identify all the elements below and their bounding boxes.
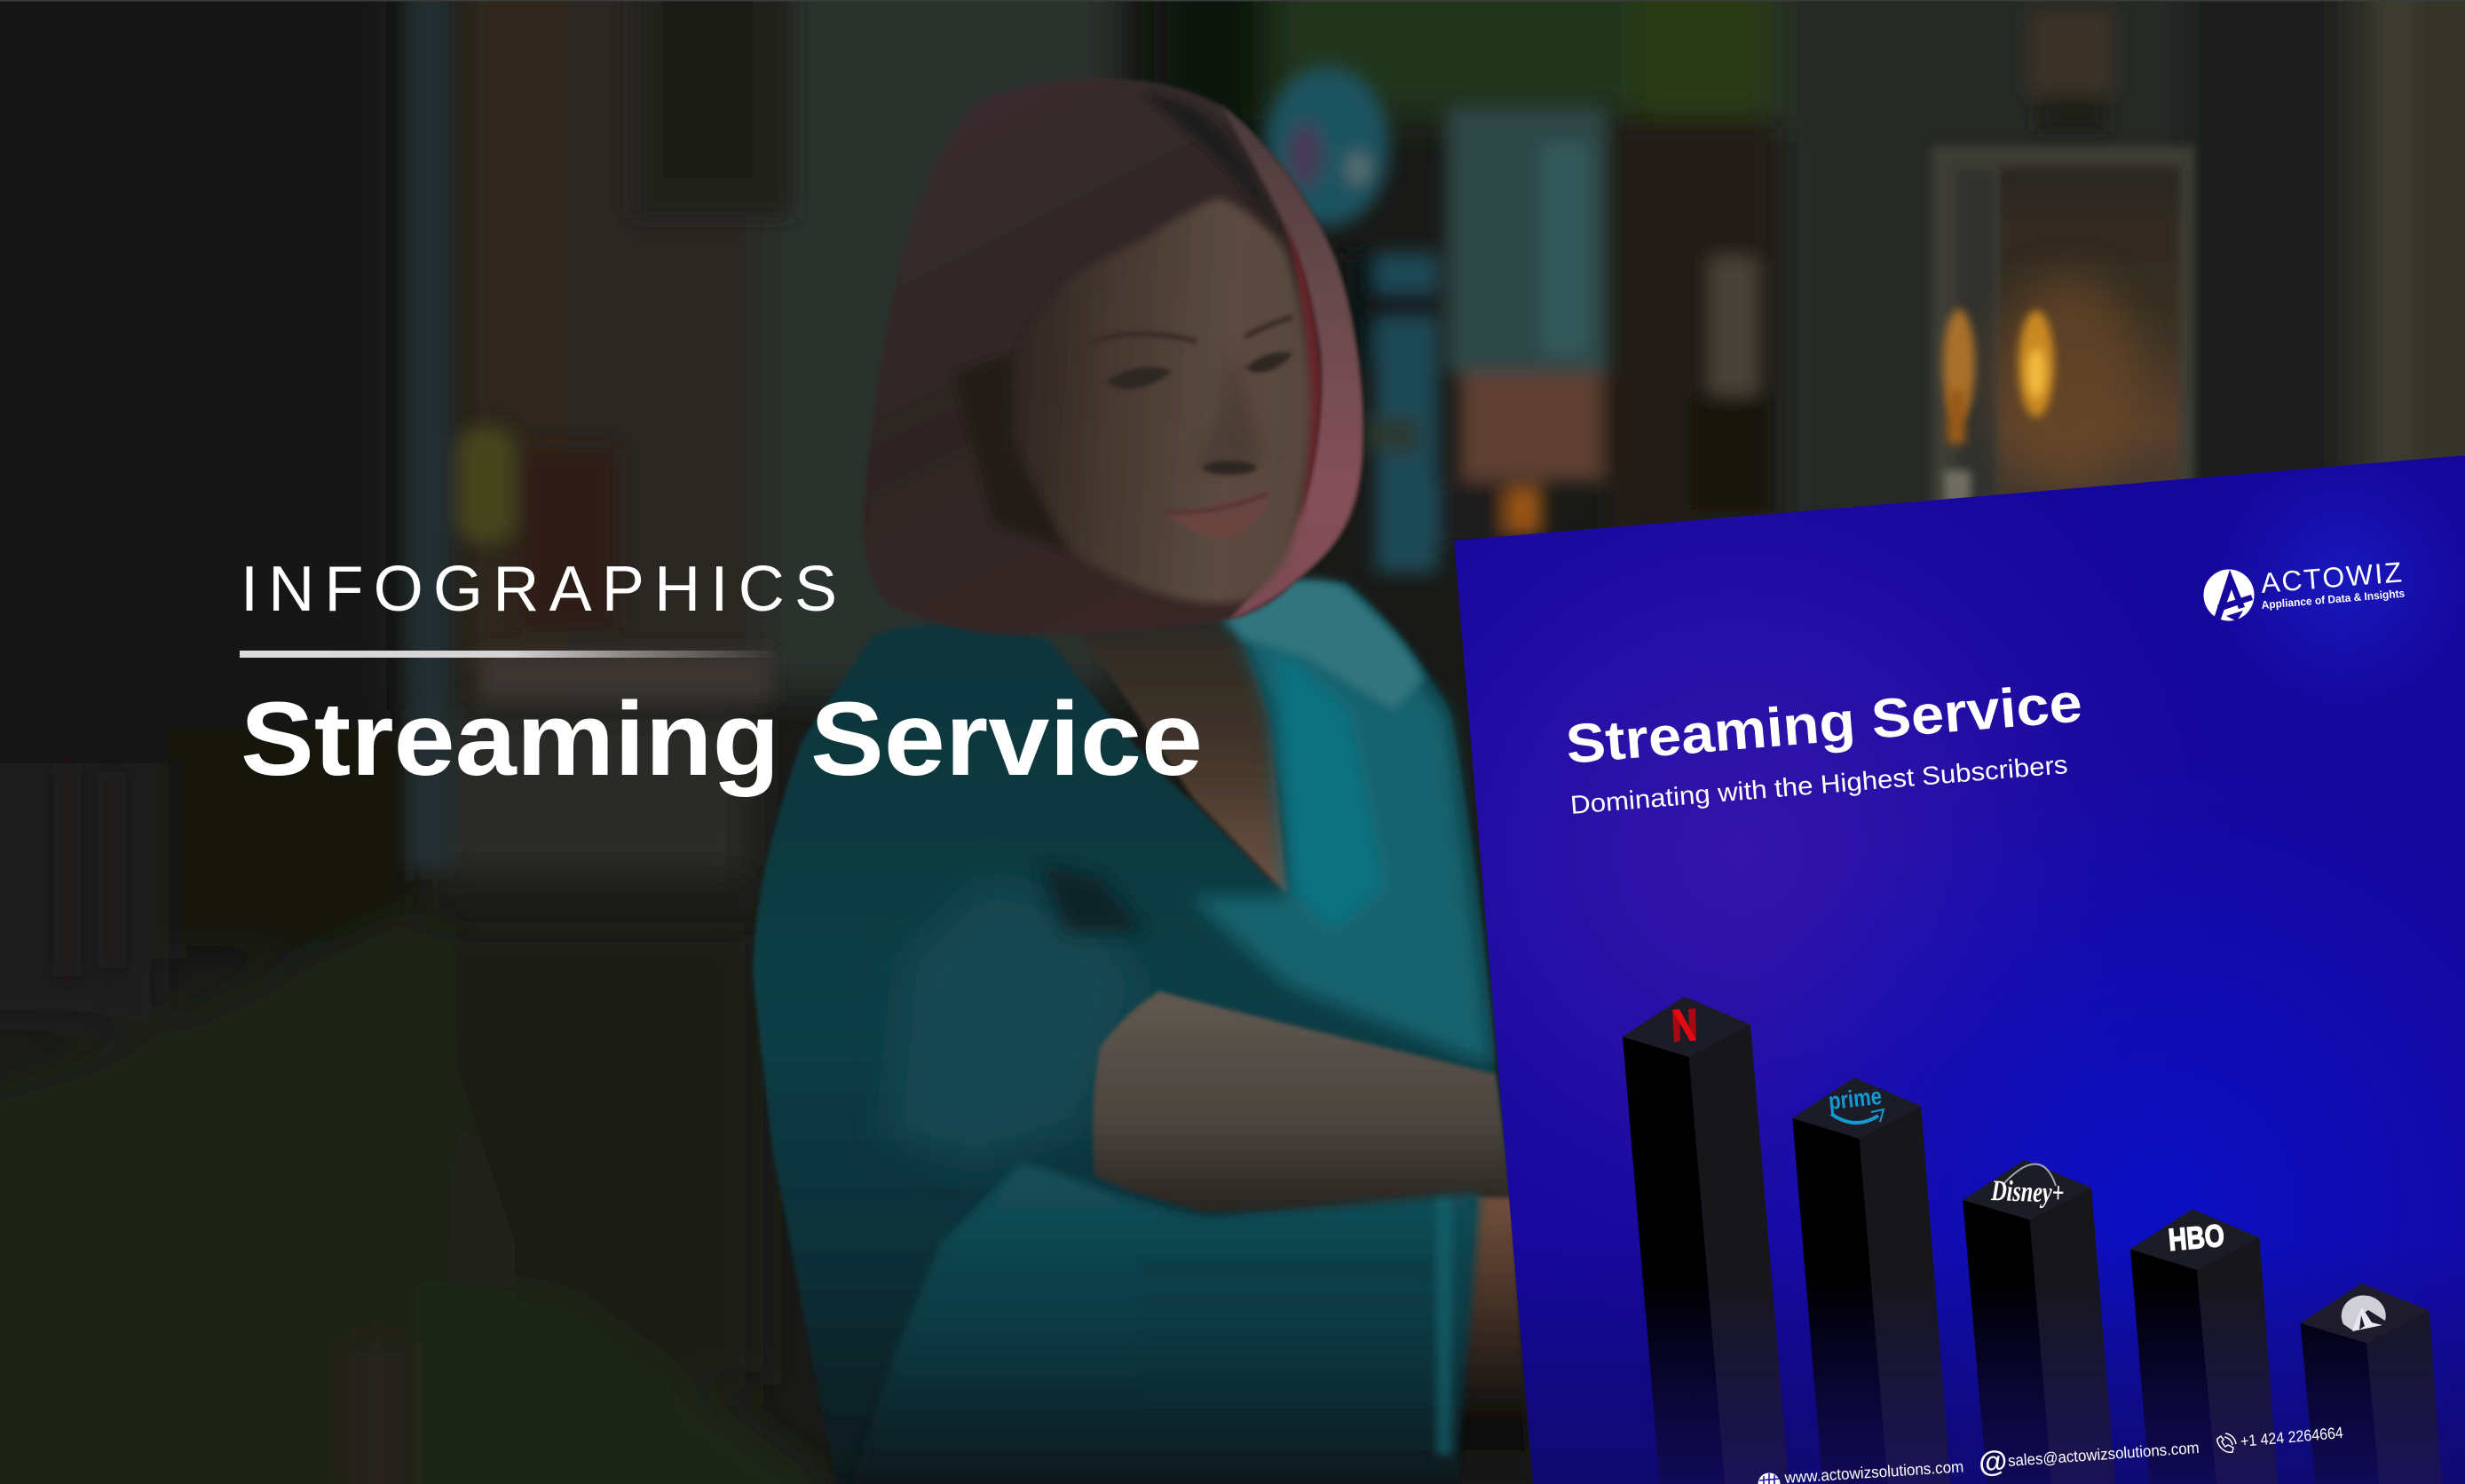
cuff ribbing: [1141, 1265, 1434, 1401]
icon: globe: [1759, 1473, 1779, 1484]
ear and cheek shadow: [954, 355, 1067, 550]
column: Paramount+: [2300, 1283, 2442, 1484]
bar chart: 3D columns: [1623, 997, 2442, 1484]
column: Disney+: [1963, 1160, 2115, 1484]
beige forearm: [1093, 991, 1513, 1214]
room walls and decor, right side: [1154, 0, 2465, 559]
icon: Netflix N: [1672, 1008, 1696, 1043]
icon: HBO logo: HBO: [2167, 1219, 2225, 1258]
eyes: [1105, 352, 1292, 389]
room walls and furniture, left side: [0, 0, 1118, 1484]
face: [995, 197, 1311, 603]
cardigan tonal shading: [1189, 589, 1491, 1065]
icon: phone: [2217, 1433, 2236, 1452]
icon: at sign: @: [1978, 1444, 2009, 1479]
thin top edge line: [0, 0, 2465, 2]
pale pink and red hair strand: [1220, 105, 1363, 620]
Actowiz logo: [2203, 563, 2405, 621]
arm and torso blocks: [753, 568, 1514, 1484]
tilted infographic panel: [1420, 444, 2465, 1484]
cardigan body: [753, 580, 1514, 1484]
soft lit sleeve: [888, 879, 1145, 1163]
woman with pink bob in teal cardigan: [753, 79, 1529, 1484]
hair: [863, 79, 1363, 635]
icon: Prime logo: [1829, 1090, 1885, 1125]
hand: [1456, 1198, 1529, 1484]
column: HBO: [2130, 1209, 2278, 1484]
column: Netflix: [1623, 997, 1789, 1484]
panel title: Streaming Service: [1563, 672, 2084, 776]
title: Streaming Service: Streaming Service: [241, 681, 1203, 798]
wall mirror with candle reflections: [1932, 146, 2194, 522]
curtain, frame, shelf objects: [62, 0, 794, 976]
nose shadow: [1194, 346, 1265, 470]
bright collar: [1199, 579, 1424, 710]
icon: Prime logo: prime: [1827, 1083, 1883, 1115]
contact: email: sales@actowizsolutions.com: [2007, 1439, 2200, 1470]
divider line under heading: [240, 651, 781, 658]
contact: phone number: +1 424 2264664: [2240, 1424, 2344, 1450]
logo wordmark: ACTOWIZ: [2260, 556, 2405, 599]
logo mark: [2203, 570, 2255, 621]
icon: Disney+ logo: [1990, 1164, 2065, 1210]
logo tagline: Appliance of Data & Insights: [2261, 587, 2406, 612]
neck and chest: [1021, 568, 1287, 895]
eyebrows: [1094, 318, 1291, 342]
lips: [1164, 490, 1270, 540]
heading: INFOGRAPHICS: INFOGRAPHICS: [241, 554, 837, 625]
sleeve fold shadow: [1040, 864, 1145, 932]
column: Prime Video: [1792, 1077, 1951, 1484]
contact row: [1759, 1424, 2344, 1484]
icon: Paramount logo: [2342, 1295, 2386, 1331]
icon: Disney+ logo: Disney+: [1990, 1175, 2065, 1210]
ribbed cuff: [852, 1163, 1481, 1484]
panel subtitle: Dominating with the Highest Subscribers: [1569, 751, 2069, 820]
